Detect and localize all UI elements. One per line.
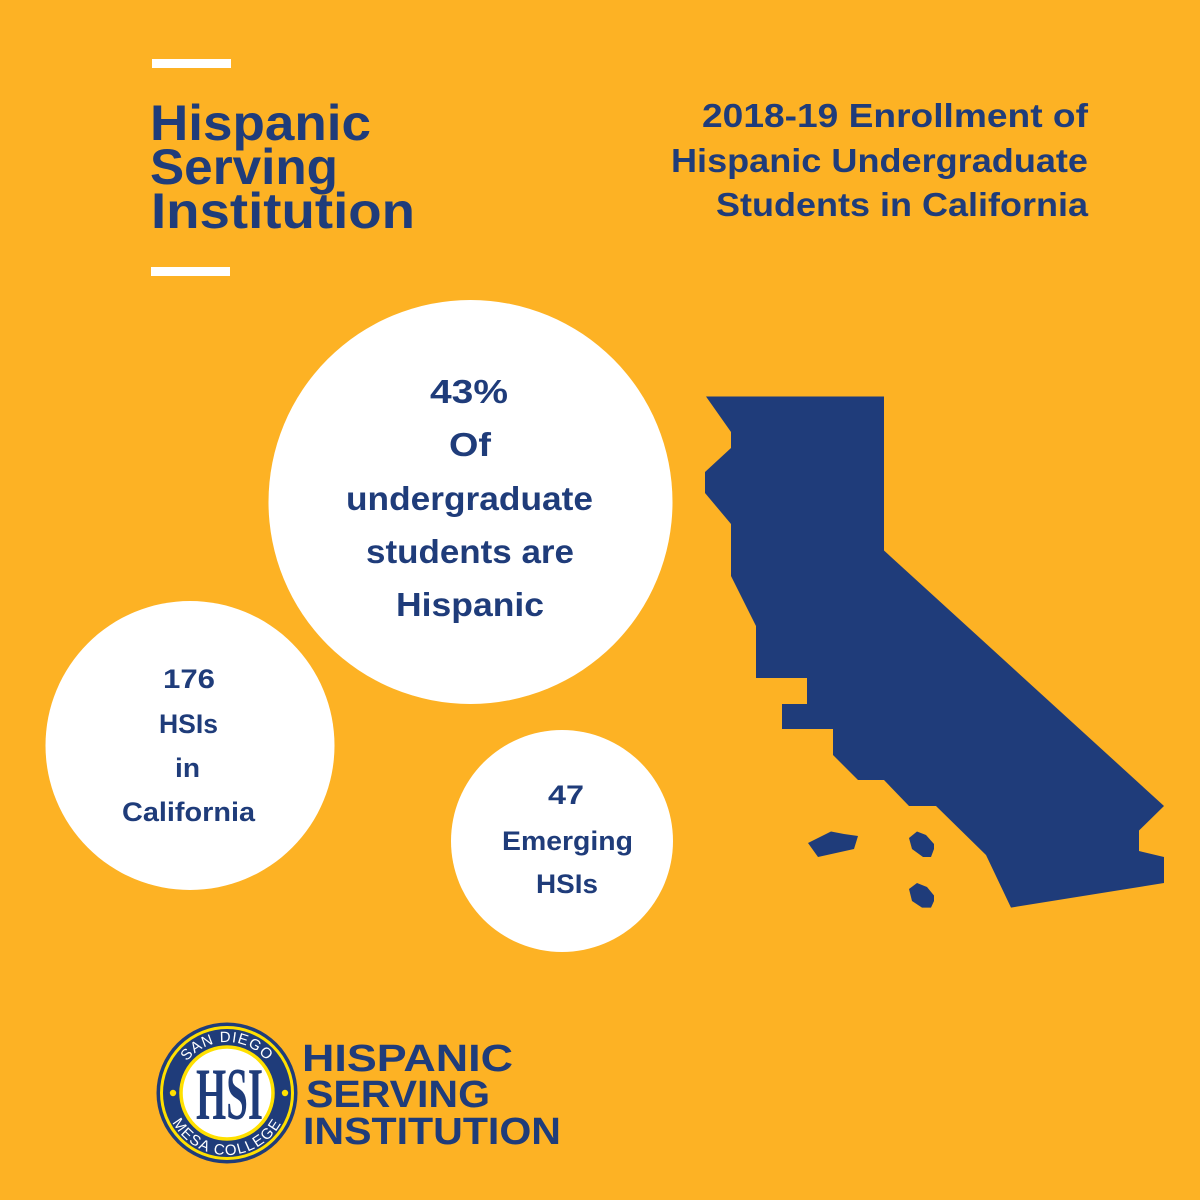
- stat circle: 43 percent: 43%: [430, 373, 508, 410]
- map: California with islands: [705, 396, 1164, 908]
- title block: Hispanic Serving Institution: Hispanic: [150, 95, 371, 151]
- stat circle: 176 HSIs: in: [175, 753, 200, 783]
- title block: Hispanic Serving Institution: Serving: [150, 139, 338, 195]
- stat circle: 43 percent: students are: [366, 533, 574, 570]
- stat circle: 43 percent: undergraduate: [346, 480, 593, 517]
- heading: enrollment subtitle: [671, 97, 1089, 223]
- title block: Hispanic Serving Institution: [150, 59, 415, 276]
- title block: Hispanic Serving Institution: Institution: [151, 183, 415, 239]
- stat circle: 43 percent: Hispanic: [396, 586, 544, 623]
- stat circle: 47 emerging HSIs: HSIs: [536, 869, 598, 899]
- logo: San Diego Mesa College HSI seal: [156, 1022, 298, 1164]
- logo wordmark: HISPANIC: [302, 1038, 513, 1080]
- stat circle: 176 HSIs: [46, 601, 334, 890]
- stat circle: 47 emerging HSIs: Emerging: [502, 826, 633, 856]
- heading: enrollment subtitle: Students in California: [716, 186, 1089, 223]
- stat circle: 176 HSIs: California: [122, 797, 256, 827]
- logo wordmark: INSTITUTION: [303, 1111, 561, 1153]
- stat circle: 176 HSIs: HSIs: [159, 709, 218, 739]
- stat circle: 43 percent: Of: [449, 426, 492, 463]
- logo wordmark: [302, 1038, 561, 1153]
- heading: enrollment subtitle: 2018-19 Enrollment of: [702, 97, 1089, 134]
- logo wordmark: SERVING: [306, 1074, 490, 1116]
- stat circle: 43 percent: [268, 300, 672, 704]
- logo: San Diego Mesa College HSI seal: HSI: [196, 1054, 263, 1136]
- stat circle: 47 emerging HSIs: [451, 730, 673, 952]
- logo: San Diego Mesa College HSI seal: MESA COLLEGE: [172, 1118, 281, 1156]
- stat circle: 176 HSIs: 176: [163, 664, 215, 694]
- logo: San Diego Mesa College HSI seal: SAN DIEGO: [181, 1032, 272, 1060]
- stat circle: 47 emerging HSIs: 47: [548, 780, 584, 810]
- heading: enrollment subtitle: Hispanic Undergraduate: [671, 142, 1088, 179]
